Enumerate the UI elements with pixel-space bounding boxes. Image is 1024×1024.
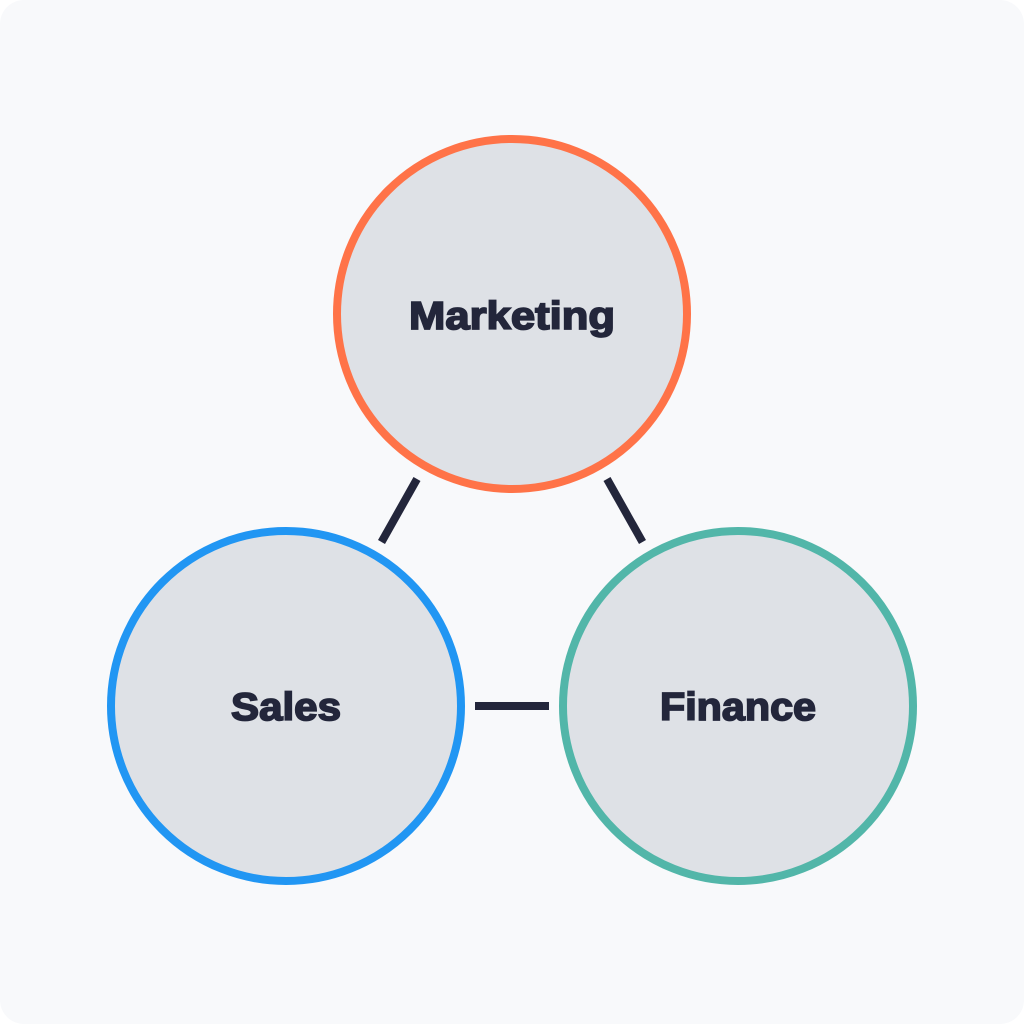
- node: Finance: [563, 531, 913, 881]
- node: Sales: [111, 531, 461, 881]
- label: Marketing: Marketing: [409, 295, 615, 338]
- circle: Sales: [111, 531, 461, 881]
- circle: Marketing: [337, 139, 687, 489]
- connector: Marketing to Finance: [607, 479, 642, 542]
- circle: Finance: [563, 531, 913, 881]
- connector: Marketing to Sales: [382, 479, 417, 542]
- label: Finance: Finance: [660, 686, 816, 729]
- connector: Sales to Finance: [475, 702, 549, 710]
- node: Marketing: [337, 139, 687, 489]
- label: Sales: Sales: [231, 686, 341, 729]
